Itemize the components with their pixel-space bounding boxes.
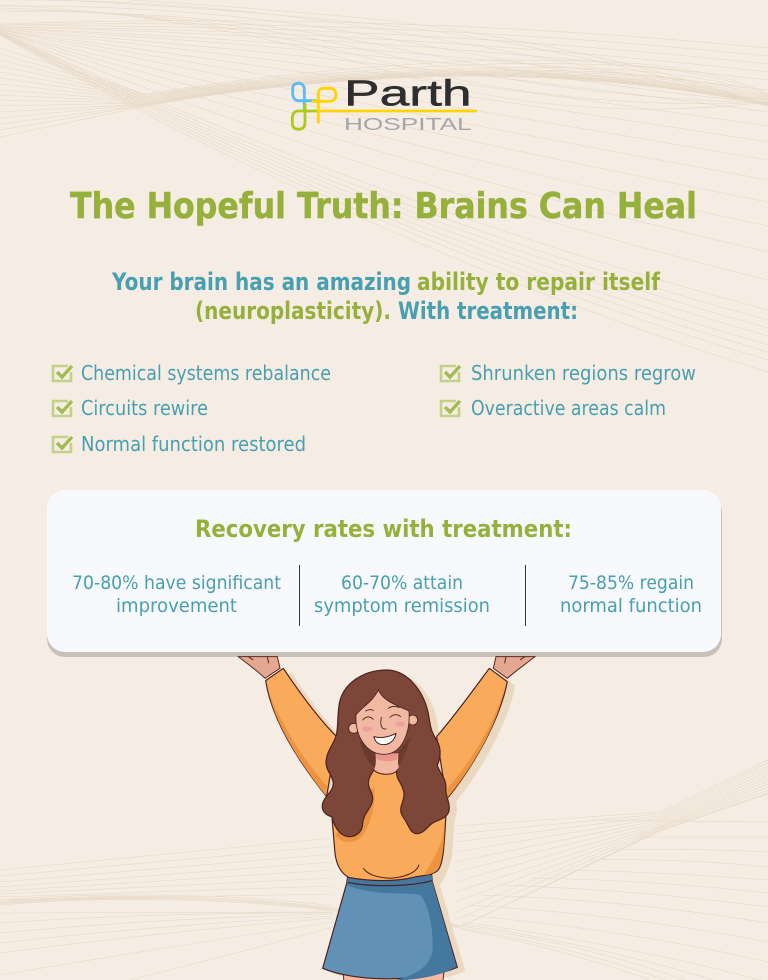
stat: symptom remission (314, 572, 490, 617)
stat: significant improvement: improvement (116, 595, 237, 617)
legs (343, 972, 444, 980)
checklist (53, 361, 696, 456)
skirt (323, 874, 457, 980)
right hand (493, 657, 535, 678)
stat: normal function: 75-85% regain (568, 572, 694, 594)
intro text: With treatment: (398, 297, 578, 325)
panel: recovery rates (47, 490, 722, 657)
face (356, 690, 409, 754)
smile (374, 733, 396, 745)
hospital logo (292, 72, 477, 134)
stat: symptom remission: symptom remission (314, 595, 490, 617)
left sleeve (266, 668, 337, 797)
logo wordmark: Parth (344, 72, 472, 113)
check item: Circuits rewire: Circuits rewire (81, 396, 208, 420)
check item: Shrunken regions regrow: Shrunken regions regrow (471, 361, 696, 385)
logo subtitle: HOSPITAL (344, 114, 472, 134)
cheeks (362, 726, 372, 732)
check item: Chemical systems rebalance: Chemical systems rebalance (81, 361, 331, 385)
check item: Overactive areas calm: Overactive areas calm (471, 396, 666, 420)
stat: normal function (560, 572, 702, 617)
stat: significant improvement (72, 572, 281, 617)
eyes and brows (363, 706, 401, 729)
intro text: Your brain has an amazing (111, 268, 411, 296)
ears (349, 715, 418, 733)
figure shadow (274, 672, 515, 980)
stat: significant improvement: 70-80% have significant (72, 572, 281, 594)
logo mark (292, 83, 336, 129)
stat: normal function: normal function (560, 595, 702, 617)
intro text: ability to repair itself (417, 268, 660, 296)
hair (322, 670, 449, 837)
neck (374, 753, 399, 774)
torso (332, 767, 446, 881)
intro text: (neuroplasticity). (195, 297, 391, 325)
right sleeve (437, 668, 507, 799)
panel heading: Recovery rates with treatment: (195, 515, 572, 543)
logo yellow rule (317, 110, 477, 112)
illustration: cheering woman holding up the panel (238, 657, 535, 980)
hair shadow (359, 737, 411, 768)
stat: symptom remission: 60-70% attain (341, 572, 463, 594)
title: The Hopeful Truth: Brains Can Heal (70, 186, 697, 227)
intro text (111, 268, 660, 325)
left hand (238, 657, 280, 678)
check item: Normal function restored: Normal function restored (81, 432, 306, 456)
